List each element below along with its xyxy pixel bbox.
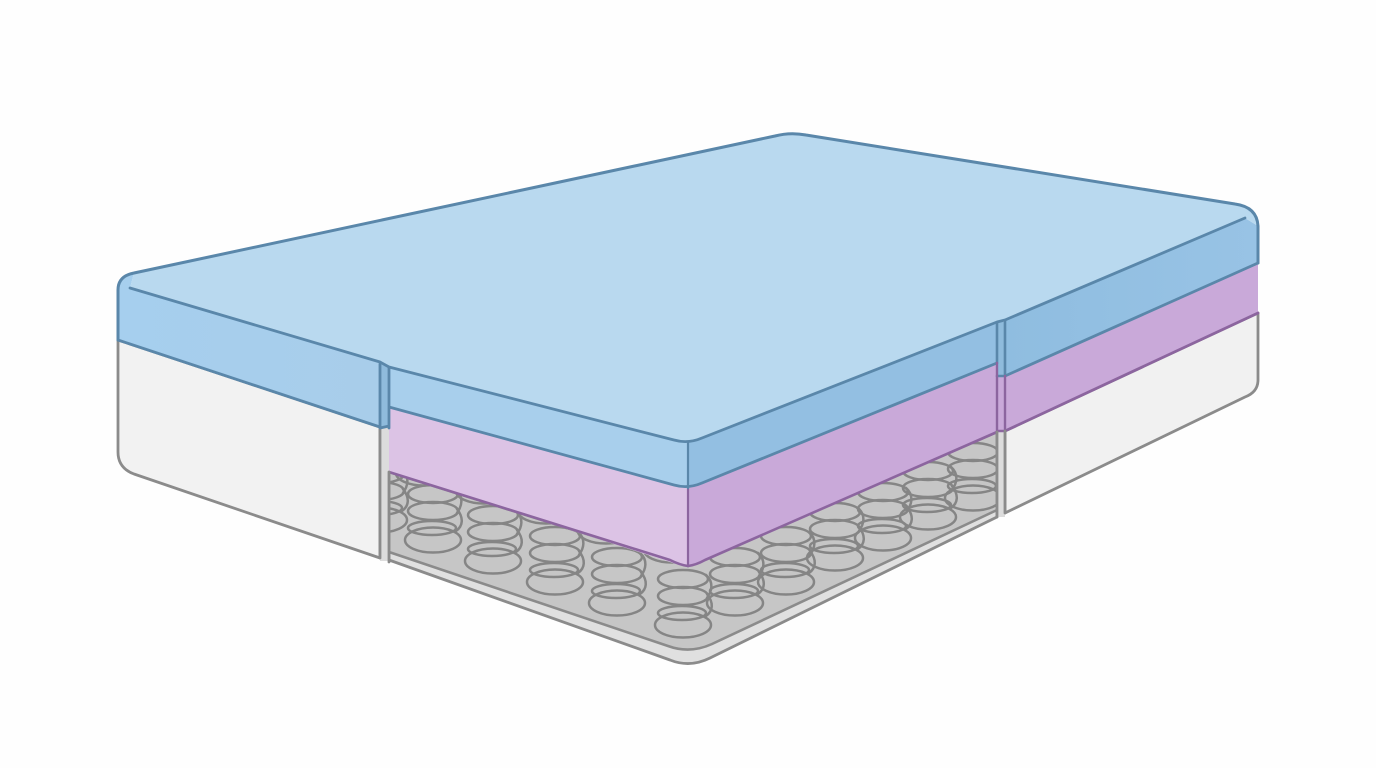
right section: white base side — [1005, 313, 1258, 513]
centre section: blue foam side — [389, 322, 997, 488]
right section: purple comfort layer — [1005, 263, 1258, 431]
front row right — [707, 443, 1002, 616]
coil springs — [390, 442, 996, 639]
left section: blue foam band — [118, 273, 380, 427]
front row left — [390, 477, 713, 639]
right cut seam — [997, 320, 1005, 517]
mattress cutaway illustration — [116, 132, 1260, 665]
top blue surface — [118, 134, 1258, 442]
surface front edge — [130, 218, 1245, 442]
back row left — [395, 476, 675, 564]
surface outer back edge — [118, 134, 1258, 340]
cutaway tray inner floor — [389, 432, 997, 650]
right section: blue foam band — [1005, 218, 1258, 376]
centre section: purple comfort layer side — [688, 363, 997, 566]
centre section: purple comfort layer front — [389, 407, 688, 566]
cutaway tray outer rim — [389, 500, 997, 664]
left cut seam — [380, 363, 389, 562]
left section: white base side — [118, 340, 380, 558]
centre section: blue foam front — [389, 367, 688, 488]
